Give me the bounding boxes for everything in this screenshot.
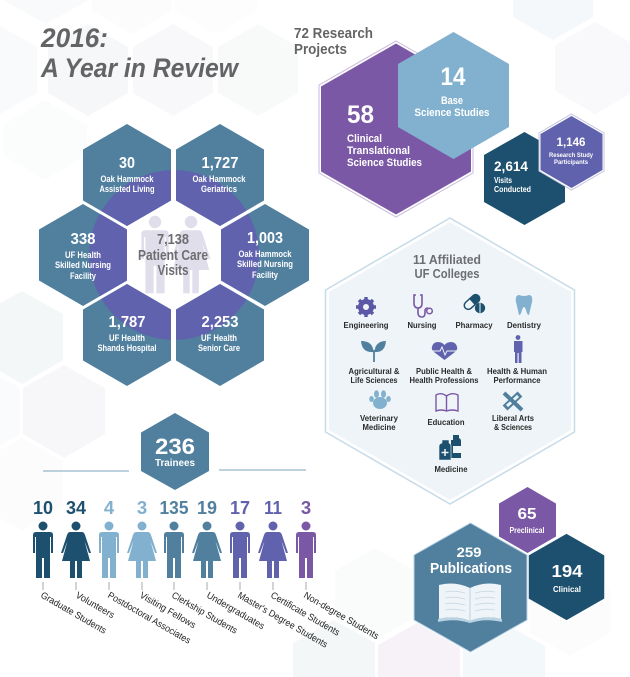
stat: Oak Hammock Skilled Nursing Facility	[237, 230, 293, 280]
trainee: graduate students: Graduate Students	[38, 590, 108, 637]
stat: UF Health Skilled Nursing Facility	[55, 231, 111, 281]
college: dentistry	[507, 295, 541, 330]
title: A Year in Review	[40, 53, 240, 83]
trainee: volunteers	[61, 497, 116, 621]
hexagon: clinical translational science studies: 58	[347, 101, 374, 129]
hexagon: visits conducted: 2,614	[494, 159, 528, 174]
trainee: graduate students: 10	[33, 497, 53, 518]
hexagon: research study participants	[539, 114, 604, 190]
hexagon: clinical translational science studies: Clinical	[347, 133, 382, 145]
stat: UF Health Shands Hospital	[98, 314, 156, 353]
hexagon: 236 trainees: Trainees	[155, 457, 195, 469]
hexagon: clinical	[528, 533, 605, 621]
stat: UF Health Skilled Nursing Facility: UF Health	[65, 250, 101, 260]
hexagon: preclinical	[499, 487, 556, 553]
college: veterinary medicine: Medicine	[362, 422, 396, 432]
hexagon: research study participants: 1,146	[556, 137, 586, 149]
trainee: non-degree students: Non-degree Students	[302, 590, 381, 642]
college: public health: Public Health &	[416, 366, 472, 376]
trainee: graduate students	[33, 497, 108, 637]
college: agricultural and life sciences: Agricultural &	[348, 366, 400, 376]
college: nursing: Nursing	[408, 320, 436, 330]
stat: Oak Hammock Skilled Nursing Facility: Facility	[252, 270, 279, 280]
stat: Oak Hammock Geriatrics: Geriatrics	[201, 184, 237, 194]
college: education	[428, 394, 464, 427]
hexagon: 259 publications: 259	[456, 544, 482, 560]
trainee: undergraduates	[192, 497, 266, 632]
trainee: master's degree students: Master's Degree Students	[236, 590, 330, 651]
hexagon: preclinical: 65	[518, 506, 537, 523]
stat: Oak Hammock Geriatrics: Oak Hammock	[192, 174, 246, 184]
stat: Oak Hammock Skilled Nursing Facility: 1,003	[247, 230, 283, 247]
college: education: Education	[428, 417, 464, 427]
patient care total: 7,138	[157, 232, 189, 248]
college: public health: Health Professions	[410, 375, 479, 385]
stat: Oak Hammock Assisted Living: 30	[119, 155, 135, 172]
hexagon: base science studies	[398, 32, 509, 159]
hexagon: base science studies: Base	[441, 95, 463, 107]
trainee: clerkship students	[160, 497, 239, 637]
college: liberal arts and sciences: & Sciences	[494, 422, 532, 432]
college: veterinary medicine: Veterinary	[360, 413, 398, 423]
trainee: undergraduates: 19	[197, 497, 217, 518]
trainee: postdoctoral associates: Postdoctoral Associates	[106, 590, 193, 647]
college: dentistry: Dentistry	[507, 320, 541, 330]
hexagon: clinical translational science studies: Science Studies	[347, 157, 422, 169]
college: pharmacy	[456, 293, 493, 330]
college: health and human performance: Health & Human	[487, 366, 547, 376]
hexagon: research study participants: Participants	[554, 159, 588, 166]
stat: UF Health Skilled Nursing Facility: Facility	[70, 271, 97, 281]
hexagon: clinical translational science studies: Translational	[347, 145, 410, 157]
panel: research projects	[294, 26, 604, 225]
college: agricultural and life sciences	[348, 341, 400, 385]
trainee: visiting fellows: 3	[137, 497, 147, 518]
icon: open book	[438, 584, 502, 623]
trainee: postdoctoral associates: 4	[104, 497, 115, 518]
heading: colleges: UF Colleges	[414, 267, 480, 281]
college: health and human performance: Performance	[494, 375, 541, 385]
college: agricultural and life sciences: Life Sciences	[350, 375, 398, 385]
college: medicine	[434, 435, 468, 474]
trainee: visiting fellows: Visiting Fellows	[138, 590, 198, 631]
hexagon: base science studies: Science Studies	[414, 107, 490, 119]
hexagon: visits conducted: Visits	[494, 176, 512, 185]
stat: Oak Hammock Geriatrics	[192, 155, 246, 194]
stat: UF Health Shands Hospital: UF Health	[109, 333, 145, 343]
hexagon: 259 publications: Publications	[430, 560, 512, 577]
heading: 72 research projects	[294, 26, 373, 58]
hexagon: base science studies: 14	[440, 63, 466, 91]
heading: 72 research projects: 72 Research	[294, 26, 373, 42]
icon: patients	[141, 216, 210, 293]
hexagon: clinical translational science studies	[319, 41, 473, 217]
trainee: clerkship students: 135	[160, 497, 188, 518]
stat: Oak Hammock Skilled Nursing Facility: Oak Hammock	[238, 249, 292, 259]
college: engineering	[344, 297, 388, 330]
college: liberal arts and sciences	[492, 393, 534, 432]
trainee: visiting fellows	[127, 497, 198, 631]
hexagon: preclinical: Preclinical	[510, 526, 544, 535]
hexagon: visits conducted	[484, 132, 565, 225]
trainee: non-degree students	[296, 497, 381, 642]
hexagon: visits conducted: Conducted	[494, 185, 531, 194]
trainee: volunteers: Volunteers	[74, 590, 116, 621]
trainee: undergraduates: Undergraduates	[204, 590, 266, 632]
trainee: master's degree students	[230, 497, 330, 651]
trainee: clerkship students: Clerkship Students	[170, 590, 239, 637]
stat: UF Health Senior Care: 2,253	[202, 314, 239, 331]
trainee: non-degree students: 3	[301, 497, 311, 518]
college: public health	[410, 342, 479, 385]
panel: publications	[412, 487, 605, 654]
heading: colleges: 11 Affiliated	[413, 253, 481, 267]
hexagon: 236 trainees: 236	[155, 434, 195, 459]
college: liberal arts and sciences: Liberal Arts	[492, 413, 534, 423]
trainee: volunteers: 34	[66, 497, 87, 518]
hexagon: clinical: 194	[552, 561, 583, 581]
hexagon: 236 trainees	[141, 413, 209, 490]
college: pharmacy: Pharmacy	[456, 320, 493, 330]
stat: UF Health Skilled Nursing Facility: 338	[70, 231, 96, 248]
stat: Oak Hammock Assisted Living: Oak Hammock	[100, 174, 154, 184]
trainee: certificate students: Certificate Students	[268, 590, 342, 639]
title	[40, 23, 240, 83]
title: 2016:	[40, 23, 108, 53]
panel: affiliated colleges	[326, 218, 574, 504]
hexagon: research study participants: Research Study	[549, 152, 593, 159]
panel: trainees	[33, 413, 381, 651]
hexagon: 259 publications	[412, 522, 528, 654]
college: health and human performance	[487, 335, 547, 385]
panel: patient care visits	[39, 124, 309, 386]
patient care total: Patient Care	[138, 248, 208, 264]
heading: colleges	[413, 253, 481, 281]
hexagon: clinical: Clinical	[553, 584, 581, 594]
patient care total	[138, 232, 208, 279]
stat: Oak Hammock Assisted Living	[100, 155, 154, 194]
college: nursing	[408, 295, 436, 330]
stat: UF Health Senior Care: UF Health	[201, 333, 237, 343]
stat: Oak Hammock Assisted Living: Assisted Living	[100, 184, 154, 194]
stat: Oak Hammock Geriatrics: 1,727	[202, 155, 238, 172]
trainee: master's degree students: 17	[230, 497, 250, 518]
stat: UF Health Senior Care	[198, 314, 240, 353]
college: engineering: Engineering	[344, 320, 388, 330]
college: medicine: Medicine	[434, 464, 468, 474]
stat: UF Health Shands Hospital: 1,787	[108, 314, 146, 331]
stat: Oak Hammock Skilled Nursing Facility: Skilled Nursing	[237, 259, 293, 269]
college: veterinary medicine	[360, 390, 398, 432]
heading: 72 research projects: Projects	[294, 42, 347, 58]
patient care total: Visits	[158, 263, 188, 279]
stat: UF Health Senior Care: Senior Care	[198, 343, 240, 353]
trainee: postdoctoral associates	[99, 497, 193, 647]
stat: UF Health Shands Hospital: Shands Hospital	[98, 343, 156, 353]
trainee: certificate students: 11	[264, 497, 282, 518]
trainee: certificate students	[258, 497, 342, 639]
stat: UF Health Skilled Nursing Facility: Skilled Nursing	[55, 260, 111, 270]
